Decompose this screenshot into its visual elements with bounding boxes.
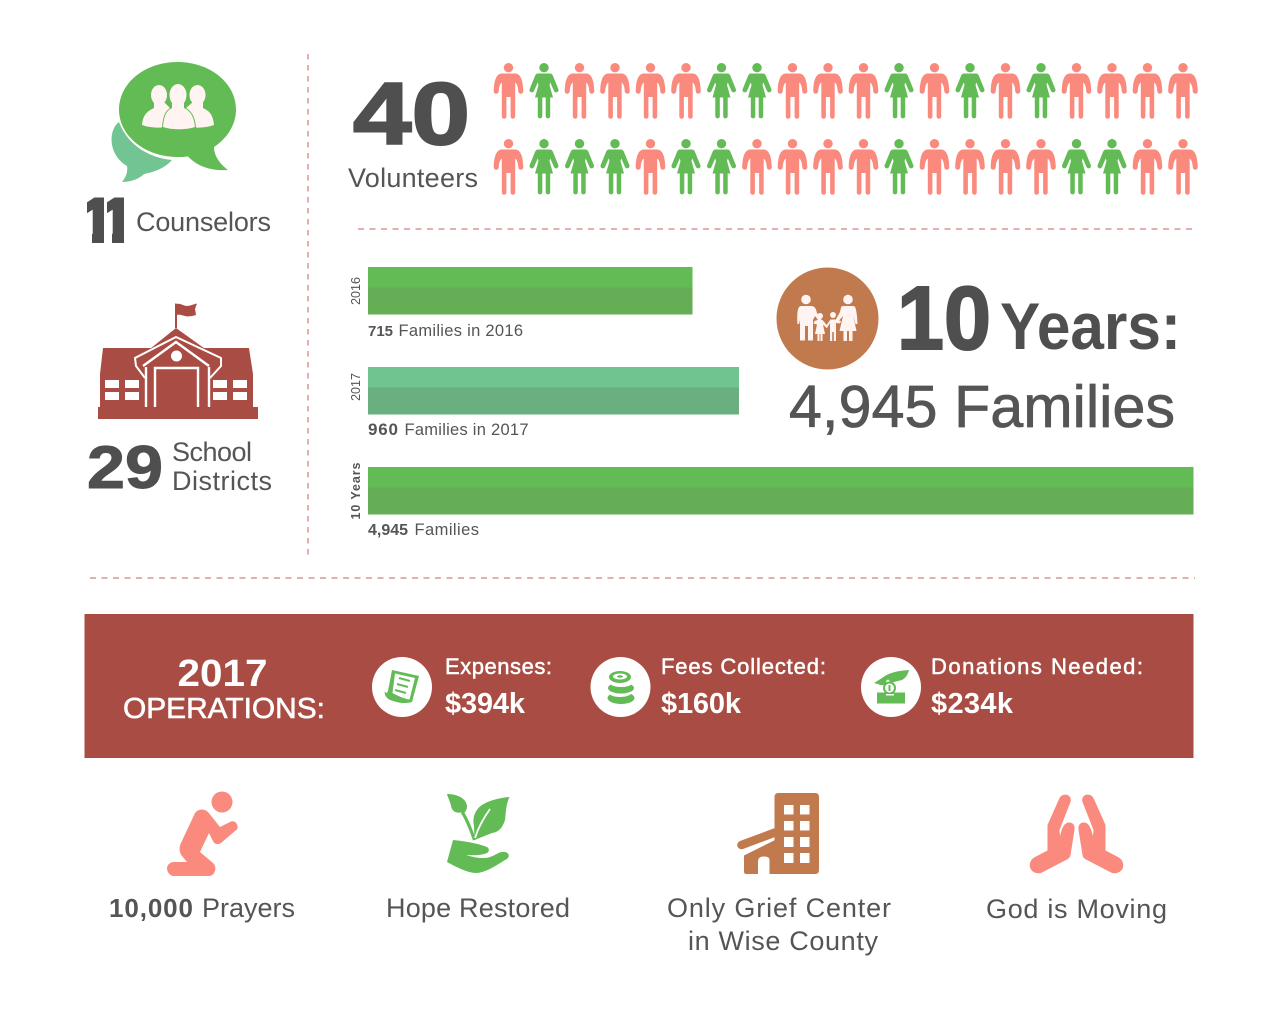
bar: 2016: Families in 2016 [398, 322, 523, 340]
stat: donations needed: $234k [931, 688, 1014, 720]
stat: 11 counselors [87, 198, 270, 243]
bar: 2017: 960 [368, 420, 398, 439]
icon: family in circle [776, 268, 878, 370]
stat: 11 counselors: Counselors [136, 207, 271, 237]
text: 10,000 prayers: Prayers [202, 893, 295, 923]
heading: 10 years 4,945 families: 10 [897, 269, 991, 369]
bar: 2016: 715 [368, 323, 393, 340]
stat: 40 volunteers: 40 [353, 64, 470, 163]
bar chart: families served [349, 267, 1194, 539]
stat: 29 school districts: 29 [87, 434, 163, 501]
bar: 10 years: 4,945 [368, 522, 408, 539]
bar: 2016: 2016 [349, 277, 363, 305]
heading: 2017 operations: 2017 [178, 653, 268, 695]
stat: fees collected: $160k [661, 688, 742, 720]
icon: fees coins [590, 657, 650, 717]
bar: 2017: 2017 [349, 373, 363, 401]
bar: 2017: Families in 2017 [404, 421, 528, 439]
panel: 2017 operations [84, 614, 1194, 758]
dashed divider: vertical [307, 54, 309, 559]
pictogram: volunteers row 2 [494, 139, 1198, 195]
icon: grief center building [742, 793, 819, 874]
text: only grief center in wise county: in Wise County [688, 926, 878, 956]
stat: 29 school districts [87, 434, 272, 501]
stat: 40 volunteers: Volunteers [348, 163, 478, 193]
stat: donations needed: Donations Needed: [931, 654, 1143, 679]
icon: praying hands [1030, 795, 1123, 873]
icon: counselors speech bubbles [112, 62, 236, 182]
text: 10,000 prayers: 10,000 [109, 893, 193, 923]
heading: 10 years 4,945 families: Years: [1000, 289, 1181, 363]
icon: praying figure [167, 792, 238, 876]
text: only grief center in wise county: Only Grief Center [667, 893, 891, 923]
heading: 10 years 4,945 families: 4,945 Families [789, 374, 1175, 440]
heading: 2017 operations [123, 653, 325, 725]
stat: 29 school districts: School [172, 437, 252, 467]
icon: school building [98, 304, 258, 419]
text: hope restored: Hope Restored [386, 893, 570, 923]
stat: expenses [445, 654, 552, 720]
stat: expenses: Expenses: [445, 654, 552, 679]
stat: fees collected: Fees Collected: [661, 654, 826, 679]
pictogram: volunteers row 1 [494, 63, 1198, 119]
stat: donations needed [931, 654, 1143, 720]
bar: 2016 [349, 267, 692, 340]
bar: 10 years [349, 462, 1194, 539]
text: 10,000 prayers [109, 893, 295, 923]
heading: 10 years 4,945 families [789, 269, 1181, 440]
icon: donation box [861, 657, 921, 717]
text: only grief center in wise county [667, 893, 891, 956]
text: god is moving: God is Moving [986, 894, 1167, 924]
heading: 2017 operations: OPERATIONS: [123, 693, 325, 725]
icon: plant in hand [447, 794, 510, 873]
icon: expenses receipt [372, 657, 432, 717]
stat: expenses: $394k [445, 688, 526, 720]
bar: 2017 [349, 367, 739, 439]
stat: 11 counselors: 11 [80, 187, 134, 256]
stat: 40 volunteers [348, 64, 478, 193]
bar: 10 years: 10 Years [349, 462, 363, 520]
stat: 29 school districts: Districts [172, 466, 272, 496]
bar: 10 years: Families [414, 521, 479, 539]
stat: fees collected [661, 654, 826, 720]
